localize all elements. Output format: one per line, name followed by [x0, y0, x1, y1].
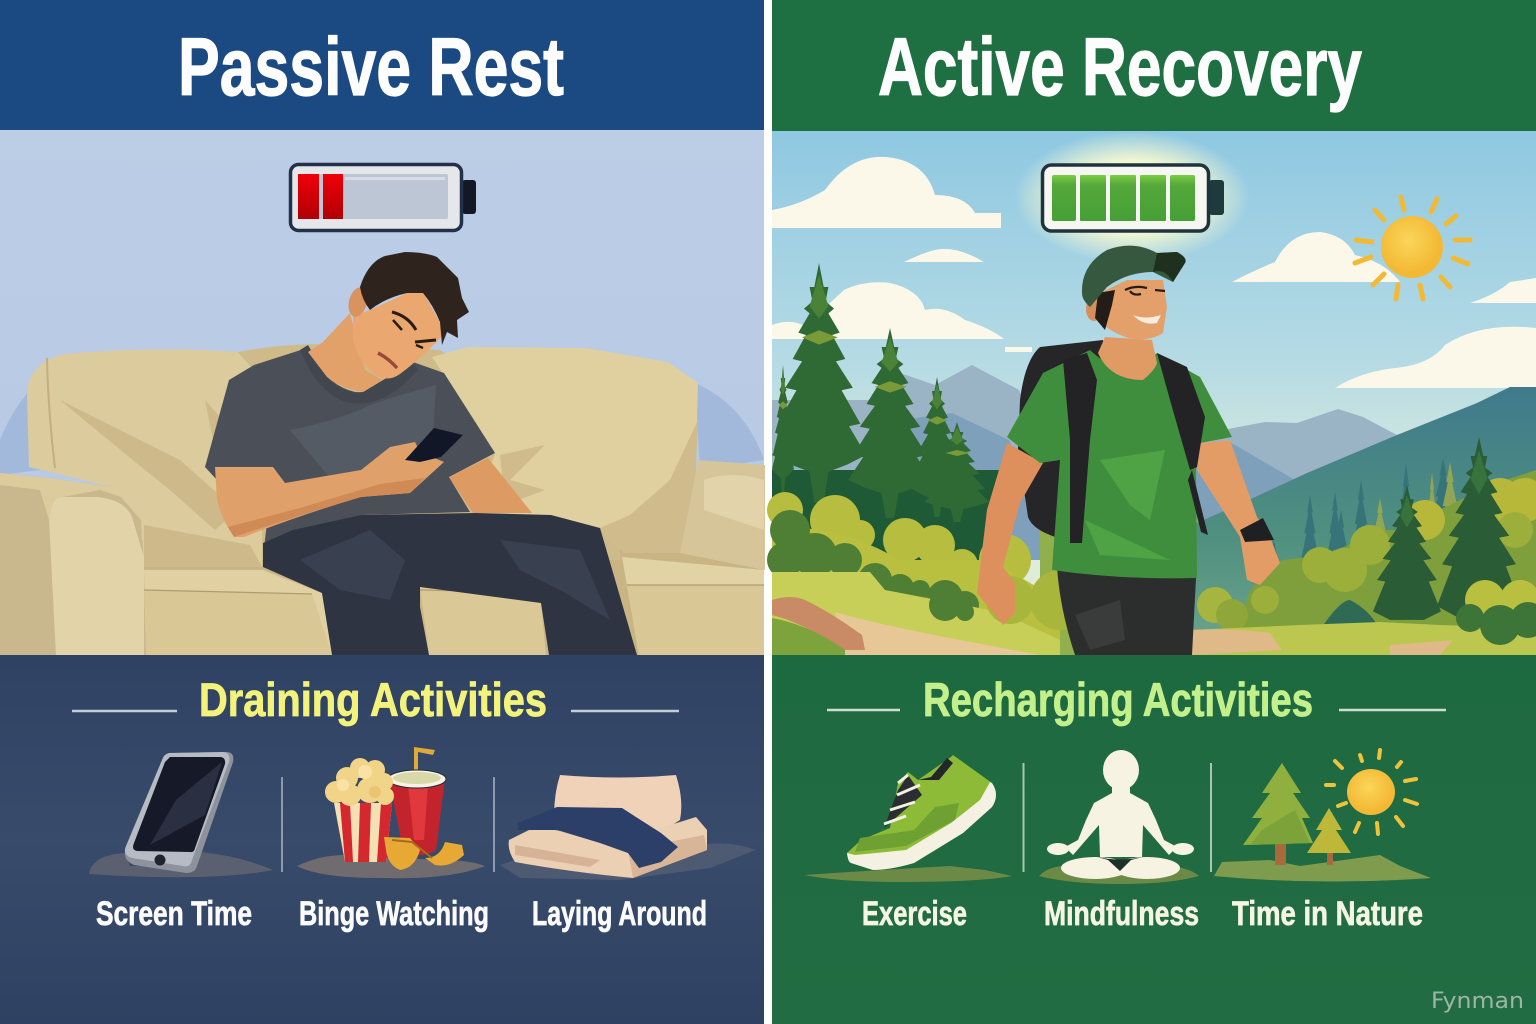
- clouds: [772, 157, 1536, 388]
- face: [1092, 280, 1167, 339]
- left arm: [977, 443, 1043, 625]
- man figure: [205, 252, 637, 655]
- cap: [1082, 246, 1186, 307]
- left mountains backdrop and forest: [772, 470, 1010, 560]
- phone in hand: [405, 428, 463, 462]
- icon: smartphone: [89, 752, 273, 877]
- activities section: recharging: [772, 655, 1536, 1024]
- scene: man slumped on couch: [0, 130, 765, 655]
- jeans: [263, 513, 637, 655]
- forested hill: [1190, 387, 1536, 640]
- icon: popcorn and soda: [297, 747, 485, 878]
- panel: active recovery: [767, 0, 1536, 1024]
- left bushes: [767, 492, 1090, 655]
- panel: passive rest: [0, 0, 765, 1024]
- straps: [1063, 353, 1205, 543]
- battery: full, five green bars: [1042, 165, 1224, 231]
- right meadow: [1190, 622, 1536, 655]
- left arm and hand: [215, 442, 444, 537]
- mountains: [772, 365, 1536, 560]
- seats: [144, 570, 332, 655]
- shirt: [205, 348, 495, 557]
- ear: [345, 285, 371, 319]
- distant trees: [1265, 458, 1456, 595]
- pants: [1057, 567, 1196, 655]
- label: Screen Time: Screen Time: [96, 895, 252, 933]
- watermark: Fynman: Fynman: [1431, 989, 1524, 1014]
- hair: [360, 252, 469, 345]
- watch: [1240, 518, 1274, 542]
- arm right: [680, 460, 765, 570]
- right forearm: [449, 458, 532, 513]
- label: Mindfulness: Mindfulness: [1044, 895, 1199, 933]
- icon: running shoe: [804, 755, 1012, 882]
- sun: [1355, 197, 1470, 299]
- label: Binge Watching: Binge Watching: [299, 895, 489, 933]
- icon: trees and sun: [1214, 750, 1431, 882]
- arm left: [0, 473, 146, 655]
- shirt: [1007, 350, 1232, 578]
- dirt path and rock: [772, 597, 1040, 655]
- left pine trees: [772, 263, 989, 522]
- backpack: [1018, 340, 1110, 545]
- hiker figure: [977, 246, 1280, 655]
- right arm: [1197, 440, 1280, 585]
- label: Exercise: Exercise: [862, 895, 967, 933]
- heading: Draining Activities: Draining Activities: [199, 673, 547, 726]
- scene: hiker in landscape: [767, 131, 1536, 655]
- right foreground bush: [1456, 580, 1536, 645]
- back cushion right: [432, 347, 698, 553]
- far-right bushes: [1197, 470, 1536, 640]
- battery glow: [1014, 131, 1250, 263]
- title: Passive Rest: Passive Rest: [178, 22, 564, 113]
- header band: passive rest: [0, 0, 764, 130]
- label: Laying Around: Laying Around: [532, 895, 707, 933]
- couch: [0, 344, 765, 655]
- face: [353, 292, 442, 379]
- title: Active Recovery: Active Recovery: [878, 22, 1362, 113]
- eyes and mouth: [392, 312, 436, 342]
- icon: pillow and blanket: [500, 775, 756, 880]
- icon: meditating figure: [1039, 750, 1199, 884]
- heading: Recharging Activities: Recharging Activities: [923, 673, 1313, 726]
- right pine trees: [1373, 437, 1521, 620]
- battery: low, two red bars: [290, 164, 476, 230]
- neck: [1098, 337, 1157, 380]
- back cushion left: [27, 349, 262, 567]
- label: Time in Nature: Time in Nature: [1232, 895, 1423, 933]
- activities section: draining: [0, 655, 764, 1024]
- header band: active recovery: [772, 0, 1536, 131]
- neck: [308, 313, 383, 392]
